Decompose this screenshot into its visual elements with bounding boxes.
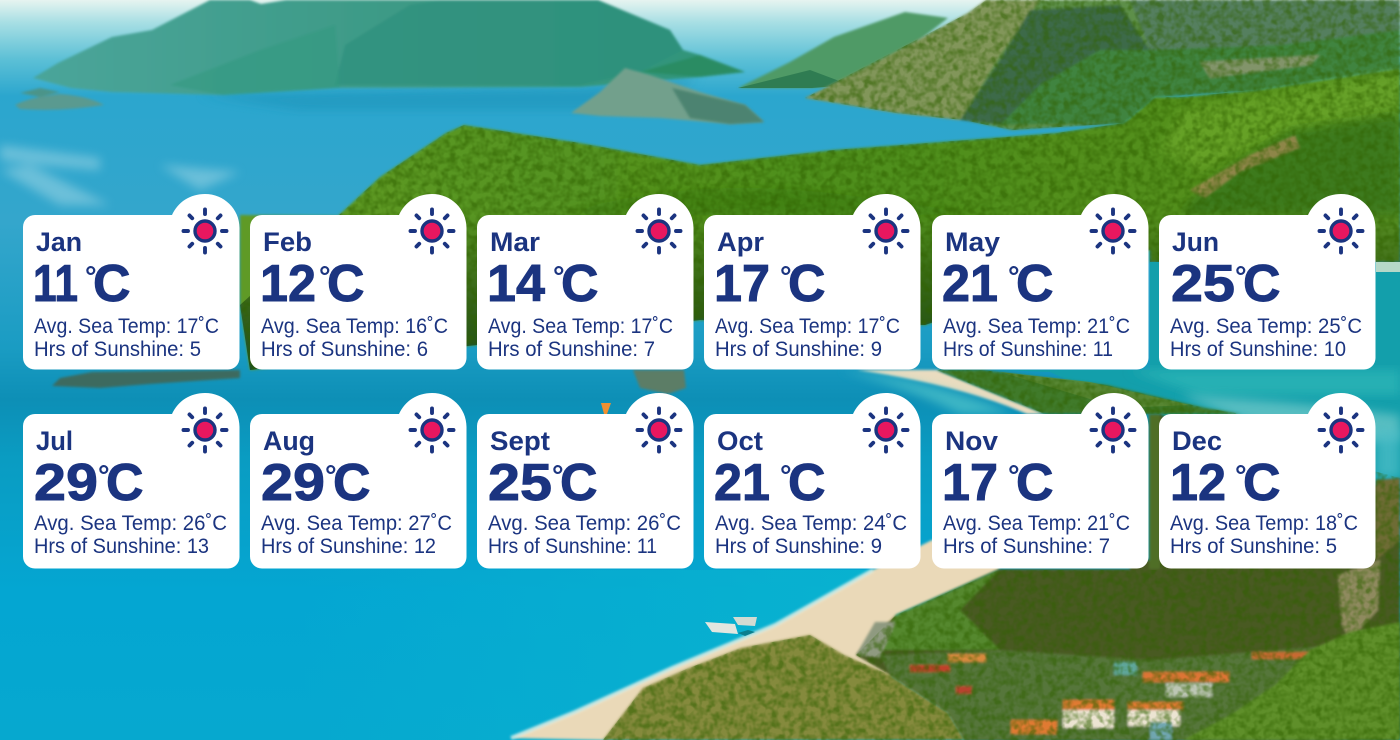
temperature: 12: [1170, 454, 1226, 512]
month: Dec: [1172, 426, 1222, 456]
temperature: C: [1243, 255, 1281, 313]
temperature: C: [106, 454, 144, 512]
temperature: [942, 454, 1054, 512]
temperature: 29: [261, 454, 325, 512]
left headland rocks: [52, 370, 240, 388]
sea temperature: Avg. Sea Temp: 25˚C: [1170, 314, 1362, 338]
card: July: [23, 393, 240, 568]
paraglider: [601, 403, 611, 414]
sea temperature: Avg. Sea Temp: 21˚C: [943, 314, 1130, 338]
sea temperature: Avg. Sea Temp: 21˚C: [943, 511, 1130, 535]
temperature: C: [560, 454, 598, 512]
sunshine hours: Hrs of Sunshine: 13: [34, 534, 209, 558]
month: Nov: [945, 426, 998, 456]
temperature: C: [788, 454, 826, 512]
sea temperature: Avg. Sea Temp: 18˚C: [1170, 511, 1358, 535]
rocky islet: [571, 68, 764, 124]
foreground trees: [603, 622, 1400, 740]
month: May: [945, 227, 1000, 257]
small left islets: [15, 88, 104, 110]
icon: sun: [184, 408, 226, 452]
icon: sun: [1320, 210, 1362, 252]
temperature: °: [780, 460, 792, 492]
card: November: [932, 393, 1148, 568]
beach curve: [857, 370, 1045, 414]
sunshine hours: Hrs of Sunshine: 7: [488, 337, 655, 361]
sunshine hours: Hrs of Sunshine: 5: [34, 337, 201, 361]
temperature: C: [327, 255, 365, 313]
distant left island: [33, 0, 745, 95]
sunshine hours: Hrs of Sunshine: 12: [261, 534, 436, 558]
tree spit: [937, 370, 1241, 414]
temperature: [714, 454, 826, 512]
temperature: [33, 255, 131, 313]
temperature: C: [93, 255, 131, 313]
month: Feb: [263, 227, 312, 257]
temperature: [34, 454, 144, 512]
temperature: °: [553, 261, 565, 293]
temperature: 25: [488, 454, 552, 512]
card: April: [704, 194, 920, 370]
month: Mar: [490, 227, 541, 257]
temperature: C: [1243, 454, 1281, 512]
icon: sun: [410, 408, 454, 452]
month: Oct: [717, 426, 763, 456]
temperature: °: [319, 261, 331, 293]
month: Jan: [36, 227, 82, 257]
temperature: [1170, 454, 1281, 512]
temperature: °: [780, 261, 792, 293]
temperature: °: [85, 261, 97, 293]
temperature: C: [788, 255, 826, 313]
icon: sun: [638, 408, 680, 452]
icon: sun: [410, 210, 454, 252]
icon: sun: [1092, 210, 1134, 252]
temperature: [487, 255, 599, 313]
sunshine hours: Hrs of Sunshine: 6: [261, 337, 428, 361]
boats: [705, 617, 757, 636]
icon: sun: [1092, 408, 1134, 452]
lower bright water: [300, 570, 900, 740]
long sandy beach: [511, 540, 1000, 740]
temperature: [260, 255, 365, 313]
card: March: [477, 194, 694, 370]
temperature: °: [98, 460, 110, 492]
sea temperature: Avg. Sea Temp: 27˚C: [261, 511, 452, 535]
temperature: C: [333, 454, 371, 512]
temperature: °: [1235, 261, 1247, 293]
near green ridge: [240, 68, 1400, 370]
temperature: °: [1008, 261, 1020, 293]
card: May: [932, 194, 1148, 370]
temperature: 14: [487, 255, 545, 313]
sunshine hours: Hrs of Sunshine: 9: [715, 534, 882, 558]
temperature: [714, 255, 826, 313]
icon: sun: [638, 210, 680, 252]
sea temperature: Avg. Sea Temp: 26˚C: [488, 511, 681, 535]
temperature: °: [552, 460, 564, 492]
temperature: 21: [714, 454, 770, 512]
temperature: 25: [1171, 255, 1235, 313]
card: June: [1159, 194, 1376, 370]
temperature: [1171, 255, 1281, 313]
temperature: 21: [942, 255, 998, 313]
card: February: [250, 194, 466, 370]
temperature: 17: [714, 255, 770, 313]
card: August: [250, 393, 466, 568]
temperature: [261, 454, 371, 512]
sunshine hours: Hrs of Sunshine: 9: [715, 337, 882, 361]
icon: sun: [1320, 408, 1362, 452]
sunshine hours: Hrs of Sunshine: 11: [943, 337, 1113, 361]
temperature: 17: [942, 454, 998, 512]
pale water streaks: [0, 145, 240, 205]
month: Aug: [263, 426, 315, 456]
temperature: C: [1016, 454, 1054, 512]
temperature: [488, 454, 598, 512]
dark water below island: [200, 78, 700, 110]
card: September: [477, 393, 694, 568]
month: Jun: [1172, 227, 1219, 257]
hillside land: [856, 414, 1400, 740]
lagoon right: [1000, 262, 1400, 505]
temperature: C: [561, 255, 599, 313]
card: October: [704, 393, 920, 568]
temperature: 11: [33, 255, 78, 313]
card: December: [1159, 393, 1376, 568]
village: [856, 622, 1340, 740]
sea temperature: Avg. Sea Temp: 24˚C: [715, 511, 907, 535]
icon: sun: [864, 210, 908, 252]
sea temperature: Avg. Sea Temp: 17˚C: [488, 314, 673, 338]
sunshine hours: Hrs of Sunshine: 5: [1170, 534, 1337, 558]
top-right mountains: [805, 0, 1400, 130]
card: January: [23, 194, 240, 370]
icon: sun: [864, 408, 908, 452]
temperature: 12: [260, 255, 316, 313]
temperature: °: [1235, 460, 1247, 492]
month: Sept: [490, 426, 550, 456]
sunshine hours: Hrs of Sunshine: 10: [1170, 337, 1346, 361]
sea temperature: Avg. Sea Temp: 17˚C: [715, 314, 900, 338]
temperature: [942, 255, 1054, 313]
temperature: 29: [34, 454, 98, 512]
month: Jul: [36, 426, 73, 456]
sunshine hours: Hrs of Sunshine: 7: [943, 534, 1110, 558]
icon: sun: [184, 210, 226, 252]
sea temperature: Avg. Sea Temp: 26˚C: [34, 511, 227, 535]
sea temperature: Avg. Sea Temp: 16˚C: [261, 314, 448, 338]
sunshine hours: Hrs of Sunshine: 11: [488, 534, 657, 558]
temperature: C: [1016, 255, 1054, 313]
temperature: °: [325, 460, 337, 492]
temperature: °: [1008, 460, 1020, 492]
far right headland: [738, 12, 948, 88]
sea temperature: Avg. Sea Temp: 17˚C: [34, 314, 219, 338]
month: Apr: [717, 227, 764, 257]
